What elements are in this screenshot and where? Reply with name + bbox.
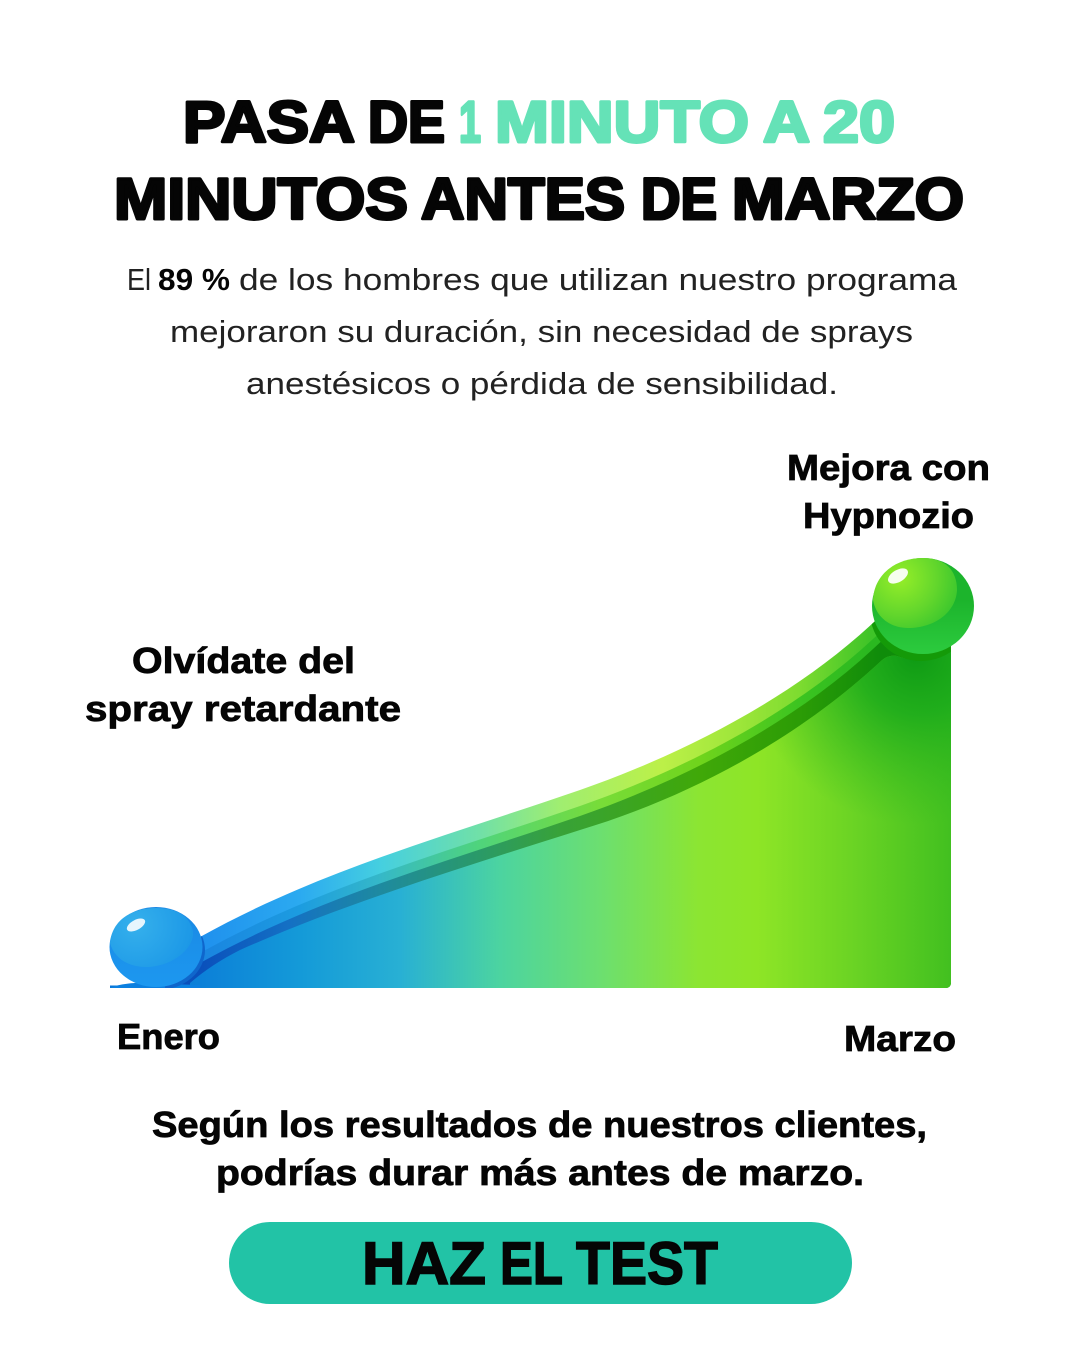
title: DE	[368, 90, 445, 155]
area chart: growth curve	[110, 621, 951, 988]
button: HAZ EL TEST	[229, 1222, 852, 1304]
curve ribbon: dark band	[182, 642, 951, 988]
baseline left tip	[111, 983, 190, 988]
closing statement: Según los resultados de nuestros clientes,	[152, 1104, 927, 1145]
label: Mejora con Hypnozio	[787, 447, 990, 536]
axis label: Marzo: Marzo	[844, 1018, 956, 1059]
icon: green ball	[872, 558, 974, 654]
axis label: Enero: Enero	[117, 1016, 220, 1057]
label: Mejora con Hypnozio: Mejora con	[787, 447, 990, 488]
top right shading	[782, 652, 951, 800]
subtitle text block: 89 %	[158, 262, 230, 297]
label: Olvídate del spray retardante	[85, 640, 401, 729]
title: 20	[823, 90, 895, 155]
title: A	[763, 90, 810, 155]
title: ANTES	[421, 167, 625, 232]
title: MINUTOS	[114, 167, 408, 232]
title	[114, 90, 964, 232]
subtitle text block: El	[127, 262, 151, 297]
baseline strip	[110, 986, 950, 988]
label: Olvídate del spray retardante: Olvídate del	[132, 640, 355, 681]
filled area under curve	[190, 648, 951, 990]
subtitle text block: anestésicos o pérdida de sensibilidad.	[246, 366, 838, 401]
title: PASA	[183, 90, 355, 155]
icon: blue ball	[110, 907, 202, 987]
subtitle text block	[127, 262, 958, 401]
ball contact shadows	[165, 621, 951, 988]
button: HAZ EL TEST: HAZ	[362, 1230, 486, 1297]
subtitle text block: mejoraron su duración, sin necesidad de sprays	[170, 314, 913, 349]
button: HAZ EL TEST: TEST	[576, 1230, 718, 1297]
closing statement	[152, 1104, 927, 1193]
label: Olvídate del spray retardante: spray retardante	[85, 688, 401, 729]
button: HAZ EL TEST: EL	[500, 1230, 563, 1297]
curve ribbon: light band	[200, 621, 951, 988]
label: Mejora con Hypnozio: Hypnozio	[803, 495, 974, 536]
subtitle text block: de los hombres que utilizan nuestro programa	[239, 262, 958, 297]
title: DE	[641, 167, 717, 232]
title: 1	[459, 90, 481, 155]
curve ribbon: middle band	[204, 636, 951, 988]
title: MINUTO	[495, 90, 749, 155]
closing statement: podrías durar más antes de marzo.	[216, 1152, 864, 1193]
title: MARZO	[732, 167, 964, 232]
